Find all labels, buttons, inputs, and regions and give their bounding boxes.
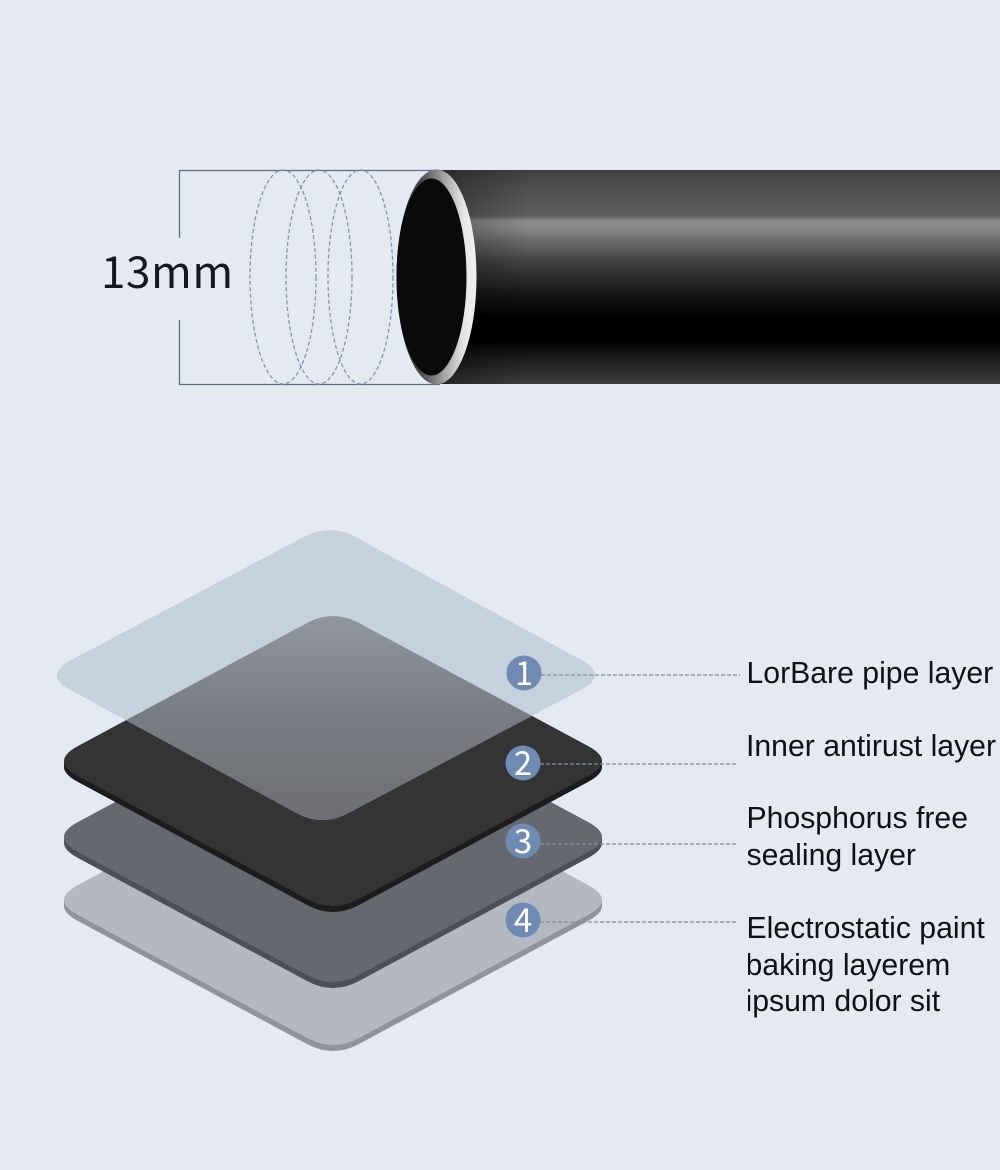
label 4: Electrostatic paint (746, 912, 985, 945)
number badge 3: 3 (514, 815, 532, 863)
number badge 4 (506, 894, 540, 942)
label 2: Inner antirust layer (746, 730, 996, 763)
number badge 2 (506, 737, 540, 785)
pipe opening (396, 178, 466, 376)
number badge 4: 4 (514, 894, 532, 942)
pipe body shading near the rim (436, 170, 536, 384)
number badge 2: 2 (514, 737, 532, 785)
layer 3: sealing (64, 692, 602, 988)
number badge 1: 1 (515, 647, 533, 695)
layer 2: inner antirust (64, 616, 602, 912)
label 4: ipsum dolor sit (746, 985, 941, 1018)
dimension label: 13mm: 13mm (101, 237, 234, 301)
leader line 1 (541, 674, 740, 676)
dashed circles showing pipe section (250, 170, 393, 384)
leader line 3 (540, 843, 737, 845)
label 3: Phosphorus free (746, 802, 968, 835)
pipe body (436, 170, 1000, 384)
leader line 4 (540, 921, 736, 923)
number badge 1 (506, 647, 542, 695)
leader line 2 (540, 763, 738, 765)
label 3: sealing layer (746, 839, 916, 872)
label 4: baking layerem (746, 949, 950, 982)
label 1: LorBare pipe layer (746, 657, 993, 690)
layer labels (746, 657, 996, 1018)
dimension bracket (180, 170, 440, 384)
layer 1: bare pipe translucent sheet (53, 530, 599, 820)
layer stack (53, 530, 602, 1051)
number badge 3 (506, 815, 540, 863)
pipe end ring (396, 170, 476, 384)
black pipe (396, 170, 1000, 384)
layer 4: electrostatic paint (64, 755, 602, 1051)
